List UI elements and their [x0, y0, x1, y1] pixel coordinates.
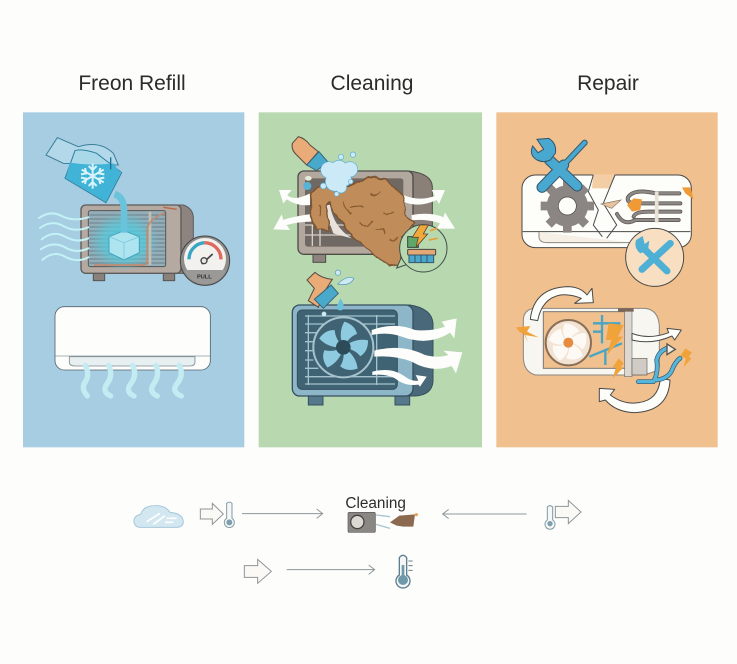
icon: burnt wire bundle [617, 192, 680, 223]
panel: Cleaning [259, 112, 482, 447]
icon: outdoor unit with glowing ice cube [81, 205, 193, 281]
icon: pressure gauge reading full: PULL [197, 275, 212, 281]
icon: loop arrows around unit [530, 287, 681, 413]
icon: pressure gauge reading full [180, 236, 230, 285]
icon: electric sparks [516, 326, 692, 367]
icon: cool air flowing down [83, 365, 181, 396]
title: Cleaning: Cleaning [331, 72, 413, 95]
panel: Freon Refill [23, 112, 244, 447]
icon: cleaning mini illustration [348, 512, 418, 532]
icon: brush with water drops [307, 270, 354, 316]
icon: opened indoor unit with fan and wiring [523, 308, 659, 378]
icon: outlined arrow 1 [200, 503, 223, 524]
icon: hand pouring freon jug [46, 138, 124, 233]
icon: cold air waves [39, 213, 88, 260]
icon: dirty outdoor unit [298, 171, 432, 262]
icon: soap brush and bubbles [292, 137, 358, 196]
arrow: right line to centre [443, 509, 527, 519]
icon: round tools badge [626, 228, 684, 286]
icon: orange sparks on wires [627, 187, 694, 212]
icon: callout with dirty brush [397, 225, 447, 272]
icon: restricted airflow arrows [273, 190, 455, 230]
arrow: lower line [287, 565, 375, 574]
icon: thermometer 2 [545, 506, 555, 529]
title: Freon Refill: Freon Refill [78, 72, 186, 95]
panel: Repair [496, 112, 718, 447]
icon: damaged indoor unit [522, 174, 691, 248]
icon: white indoor AC unit [55, 307, 210, 370]
bottom flow diagram [134, 495, 581, 588]
icon: crossed wrench and screwdriver [531, 138, 585, 187]
icon: thermometer 3 [396, 555, 413, 588]
icon: outlined arrow 2 [555, 500, 581, 524]
icon: outlined arrow 3 [244, 559, 271, 583]
icon: clean outdoor unit [292, 305, 433, 405]
title: Repair: Repair [577, 72, 639, 95]
icon: strong clean airflow arrows [372, 318, 462, 387]
icon: thermometer 1 [224, 502, 234, 528]
icon: gear [541, 179, 594, 233]
icon: blue hoses and connectors [638, 344, 680, 382]
icon: cloud [134, 506, 183, 527]
icon: dust and grime [311, 177, 414, 267]
arrow: left line to centre [242, 509, 323, 518]
label: Cleaning: Cleaning [345, 495, 406, 512]
